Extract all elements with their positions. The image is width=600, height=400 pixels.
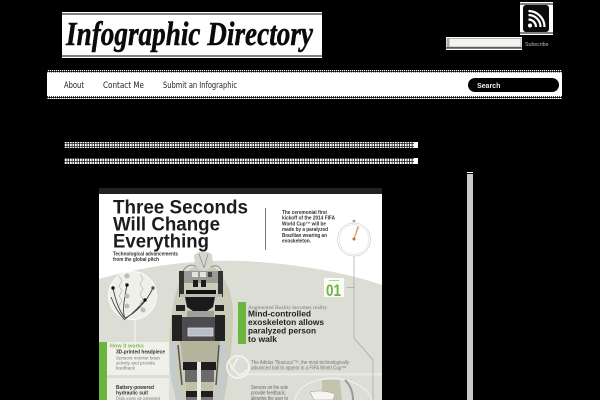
step badge: 01 (324, 278, 354, 300)
body silhouette (169, 264, 233, 400)
callout: mind-controlled exoskeleton: Augmented Reality becomes reality (248, 305, 327, 311)
search box (468, 78, 559, 92)
legs (183, 362, 197, 370)
subheading: from the global pitch (113, 257, 159, 263)
intro text: World Cup™ will be (282, 221, 326, 227)
head (194, 251, 213, 273)
callout: mind-controlled exoskeleton: paralyzed person (248, 326, 316, 336)
subscribe field: Subscribe (525, 42, 549, 48)
subheading: Technological advancements (113, 252, 178, 258)
sidebar scrollbar (467, 172, 473, 400)
ball and foot detail (295, 378, 372, 400)
how it works list: hydraulic suit (116, 390, 148, 396)
subheading (113, 252, 178, 263)
ball caption: The Adidas “Brazuca”™, the most technologically (251, 360, 349, 366)
how it works list: activity and provide (116, 360, 155, 366)
icon: stopwatch (338, 220, 370, 256)
intro text: The ceremonial first (282, 210, 327, 216)
intro text (282, 210, 335, 244)
callout: mind-controlled exoskeleton: to walk (248, 334, 277, 344)
exoskeleton robot (172, 251, 225, 400)
dotted divider: top (64, 142, 418, 148)
nav link: About: About (64, 81, 85, 91)
callout: mind-controlled exoskeleton: Mind-controlled (248, 308, 311, 318)
icon: Brazuca ball (227, 356, 249, 378)
how it works list (110, 344, 165, 400)
torso pack (182, 317, 215, 341)
callout: mind-controlled exoskeleton (248, 305, 327, 344)
pelvis (180, 341, 220, 362)
how it works list: How it works (110, 344, 144, 350)
green side bar (99, 342, 107, 400)
sensors note: provide feedback, (251, 390, 286, 396)
navigation bar (47, 70, 562, 99)
divider rule (265, 208, 266, 250)
timeline line (354, 256, 373, 400)
search box: Search (477, 83, 500, 90)
how it works list: feedback (116, 366, 136, 372)
side braces (172, 343, 224, 400)
dotted divider: bottom (64, 158, 418, 164)
headpiece detail circle (108, 272, 156, 342)
callout: mind-controlled exoskeleton: exoskeleton allows (248, 317, 324, 327)
how it works list: Battery-powered (116, 385, 154, 391)
intro text: Brazilian wearing an (282, 233, 327, 239)
intro text: made by a paralyzed (282, 227, 328, 233)
shoulders (184, 271, 218, 283)
logo: Infographic Directory: Infographic Directory (65, 16, 313, 53)
heading: Will Change (113, 214, 220, 236)
intro text: exoskeleton. (282, 238, 312, 244)
sensors note: Sensors on the sole (251, 385, 288, 391)
heading (113, 198, 248, 252)
step badge: 01: 01 (326, 282, 341, 300)
how it works list: 3D-printed headpiece (116, 350, 165, 356)
ball caption: advanced ball to appear in a FIFA World Cup™ (251, 366, 346, 372)
heading: Everything (113, 232, 209, 252)
ball caption (251, 360, 349, 372)
logo: Infographic Directory (62, 12, 322, 58)
green marker bar (238, 302, 246, 344)
grey background field (99, 261, 382, 400)
infographic: Three Seconds Will Change Everything (99, 188, 382, 400)
how it works list: Sensors monitor brain (116, 356, 160, 362)
nav link: Contact Me: Contact Me (103, 81, 144, 91)
subscribe field (446, 37, 549, 50)
intro text: kickoff of the 2014 FIFA (282, 216, 335, 222)
nav link: Submit an Infographic: Submit an Infographic (163, 81, 237, 91)
chest (185, 297, 215, 311)
icon: RSS feed (520, 2, 553, 35)
heading: Three Seconds (113, 198, 248, 218)
sensors note (251, 385, 288, 400)
